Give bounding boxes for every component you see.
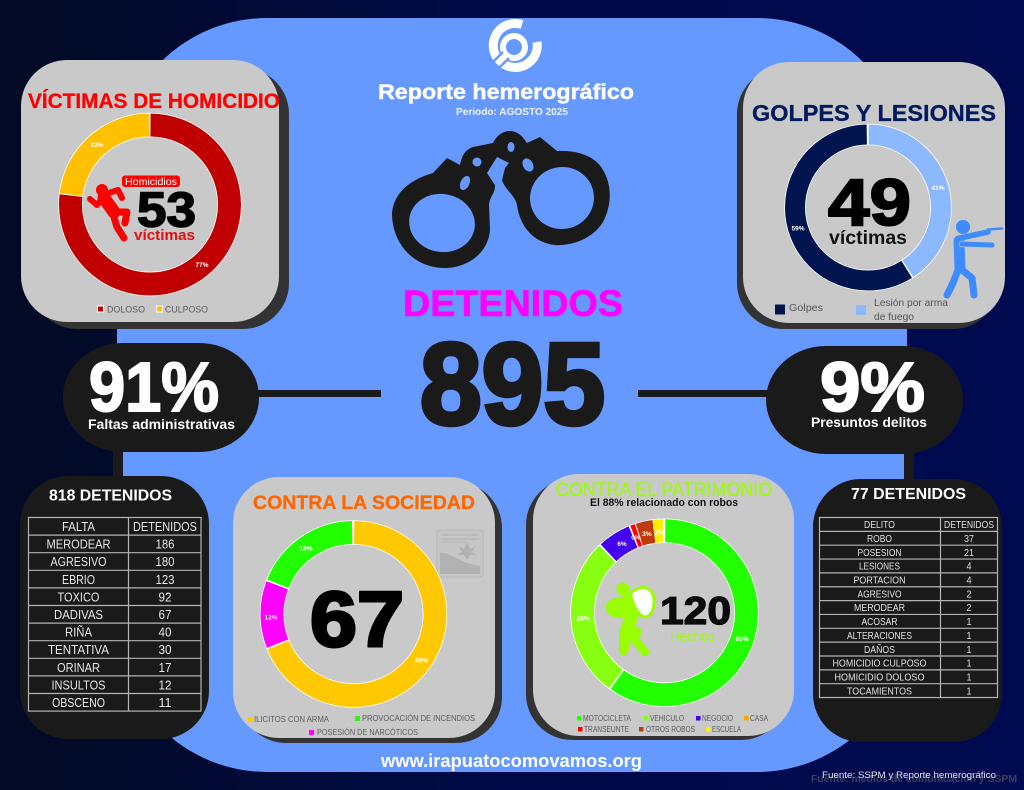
table: 1 [966, 685, 972, 697]
icon: thief with sack [606, 582, 654, 655]
table: EBRIO [62, 573, 95, 587]
legend: VEHICULO [650, 714, 684, 723]
table: DETENIDOS [944, 519, 994, 531]
legend [577, 714, 769, 734]
source note underlay: Fuente: medios de comunicación y SSPM [811, 773, 1017, 785]
table: DETENIDOS [133, 520, 197, 534]
table: ALTERACIONES [847, 630, 912, 642]
table [28, 518, 201, 711]
legend: MOTOCICLETA [583, 714, 632, 723]
table: DADIVAS [54, 608, 103, 622]
callout: 91%: Faltas administrativas [88, 417, 235, 432]
percent labels: 28% [576, 616, 590, 622]
victims label: víctimas [829, 228, 907, 249]
table: 37 [964, 533, 974, 545]
percent labels: 69% [415, 658, 428, 664]
callout: 9%: Presuntos delitos [811, 415, 927, 430]
legend: de fuego [874, 311, 914, 323]
table: HOMICIDIO DOLOSO [834, 672, 924, 684]
total: 67 [310, 575, 404, 663]
report title: Reporte hemerográfico [378, 81, 634, 104]
table: TOXICO [58, 590, 100, 604]
panel: faltas administrativas table [20, 476, 209, 739]
legend: DOLOSO [107, 304, 145, 314]
legend: TRANSEUNTE [584, 725, 629, 734]
percent labels: 60% [735, 636, 749, 643]
table: 1 [966, 616, 972, 628]
percent labels [791, 185, 945, 232]
donut chart [70, 125, 230, 284]
total victims: 49 [828, 165, 911, 239]
table title: 77 DETENIDOS [851, 486, 966, 503]
donut chart [582, 531, 746, 695]
table: 12 [158, 678, 172, 692]
table: ORINAR [57, 661, 100, 675]
percent labels: 23% [90, 142, 104, 149]
table title: 818 DETENIDOS [49, 488, 172, 504]
table: LESIONES [859, 561, 900, 573]
panel: contra el patrimonio [526, 474, 794, 740]
central blue panel [117, 18, 907, 772]
table: INSULTOS [52, 678, 106, 692]
table: 40 [158, 626, 172, 640]
legend: POSESIÓN DE NARCÓTICOS [317, 727, 418, 737]
table: 180 [156, 555, 175, 569]
legend: PROVOCACIÓN DE INCENDIOS [362, 713, 475, 723]
legend [98, 304, 208, 314]
table: TOCAMIENTOS [847, 685, 912, 697]
percent labels [576, 530, 749, 643]
table: OBSCENO [52, 696, 105, 710]
callout: 9% [766, 346, 963, 454]
legend: ILICITOS CON ARMA [254, 714, 329, 724]
legend: Lesión por arma [874, 297, 948, 309]
panel: golpes y lesiones [737, 62, 1005, 329]
legend: NEGOCIO [702, 714, 733, 723]
percent labels: 59% [791, 226, 805, 232]
events label: Hechos [670, 628, 715, 645]
panel: contra la sociedad [233, 477, 502, 743]
table: 4 [966, 561, 972, 573]
icon: narcotics bag [437, 530, 483, 577]
table: 1 [966, 658, 972, 670]
table: RIÑA [65, 626, 93, 640]
table: MERODEAR [854, 602, 905, 614]
table: PORTACION [854, 574, 906, 586]
icon: shooter [947, 220, 1002, 295]
legend: ESCUELA [712, 725, 742, 734]
table: ROBO [867, 533, 892, 545]
table: FALTA [62, 520, 96, 534]
table: MERODEAR [46, 538, 110, 552]
percent labels: 3% [642, 531, 652, 538]
percent labels: 12% [264, 614, 278, 622]
table: 2 [966, 588, 972, 600]
percent labels: 19% [299, 546, 313, 552]
heading: GOLPES Y LESIONES [752, 100, 996, 126]
website: www.irapuatocomovamos.org [380, 751, 642, 771]
table: 2 [966, 602, 972, 614]
percent labels [264, 546, 428, 664]
legend: CULPOSO [165, 304, 208, 314]
legend [775, 297, 948, 323]
heading: CONTRA EL PATRIMONIO [556, 480, 772, 501]
total detainees: 895 [420, 319, 605, 449]
table: DAÑOS [864, 643, 895, 656]
table: AGRESIVO [858, 588, 902, 600]
legend: Golpes [789, 302, 823, 314]
table: 92 [158, 590, 172, 604]
table: 4 [966, 574, 972, 586]
table: HOMICIDIO CULPOSO [832, 658, 926, 670]
percent labels: 0% [631, 534, 641, 542]
legend: CASA [750, 714, 769, 723]
table: ACOSAR [862, 616, 898, 628]
table: 123 [156, 573, 175, 587]
table: AGRESIVO [50, 555, 107, 569]
table: 17 [158, 661, 172, 675]
percent labels: 41% [931, 185, 945, 192]
donut chart [272, 532, 435, 696]
heading: VÍCTIMAS DE HOMICIDIO [28, 90, 280, 113]
legend: OTROS ROBOS [646, 725, 695, 734]
table: 1 [966, 644, 972, 656]
table: DELITO [864, 519, 895, 531]
panel: victimas de homicidio [21, 60, 289, 329]
icon: handcuffs [392, 131, 610, 268]
report period: Periodo: AGOSTO 2025 [456, 107, 568, 118]
table: 186 [156, 538, 175, 552]
percent labels: 77% [195, 262, 209, 269]
source note: Fuente: SSPM y Reporte hemerográfico [822, 770, 996, 781]
logo [493, 23, 537, 67]
percent labels: 6% [617, 541, 627, 548]
table: 1 [966, 672, 972, 684]
table: TENTATIVA [48, 643, 110, 657]
percent labels [90, 142, 209, 269]
percent labels: 2% [655, 530, 665, 536]
table: POSESION [858, 547, 902, 559]
heading: CONTRA LA SOCIEDAD [253, 492, 475, 514]
connector lines [113, 390, 914, 482]
table: 1 [966, 630, 972, 642]
donut chart [795, 134, 941, 280]
subheading: El 88% relacionado con robos [590, 497, 738, 509]
total: 120 [660, 590, 731, 633]
victims label: víctimas [134, 227, 195, 244]
table: 11 [158, 696, 172, 710]
table: 21 [964, 547, 974, 559]
callout: 91% [63, 343, 259, 452]
badge: homicidios: Homicidios [125, 177, 177, 188]
callout: 91%: 91% [89, 348, 219, 426]
panel: presuntos delitos table [813, 479, 1002, 742]
heading: detenidos: DETENIDOS [403, 282, 623, 324]
table: 67 [158, 608, 172, 622]
total victims: 53 [137, 184, 196, 238]
callout: 9%: 9% [820, 348, 925, 426]
table: 30 [158, 643, 172, 657]
icon: running victim [90, 184, 127, 238]
legend [248, 713, 475, 737]
table [820, 518, 998, 698]
